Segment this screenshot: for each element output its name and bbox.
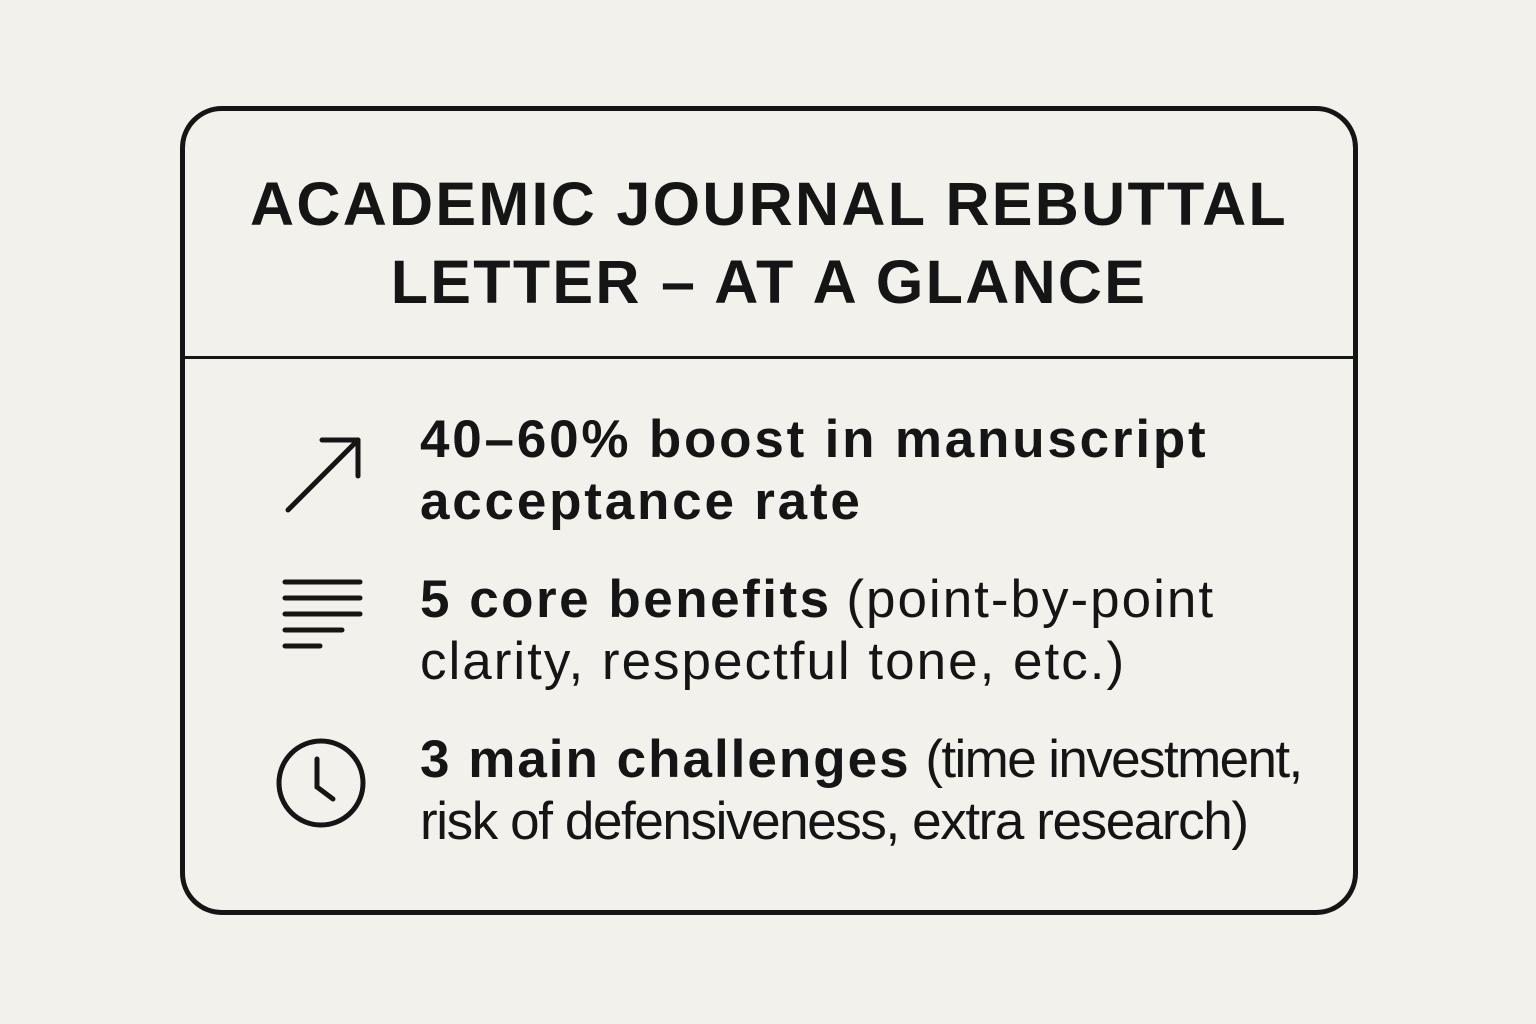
text: acceptance boost: acceptance rate	[420, 472, 863, 531]
text: core benefits	[420, 570, 1215, 691]
text: core benefits: 5 core benefits (point-by-point	[420, 570, 1215, 629]
icon: arrow up-right	[286, 438, 360, 512]
title: LETTER – AT A GLANCE	[391, 248, 1147, 316]
text: core benefits: clarity, respectful tone, etc.)	[420, 632, 1126, 691]
icon: clock	[276, 738, 366, 828]
text: main challenges	[420, 730, 1302, 851]
text: acceptance boost	[420, 410, 1209, 531]
panel: card	[180, 106, 1358, 915]
icon: text lines	[282, 580, 362, 648]
text: main challenges: 3 main challenges (time investment,	[420, 730, 1302, 789]
text: main challenges: risk of defensiveness, extra research)	[420, 792, 1248, 851]
title: ACADEMIC JOURNAL REBUTTAL	[250, 170, 1288, 238]
text: acceptance boost: 40–60% boost in manuscript	[420, 410, 1209, 469]
title	[250, 170, 1288, 316]
